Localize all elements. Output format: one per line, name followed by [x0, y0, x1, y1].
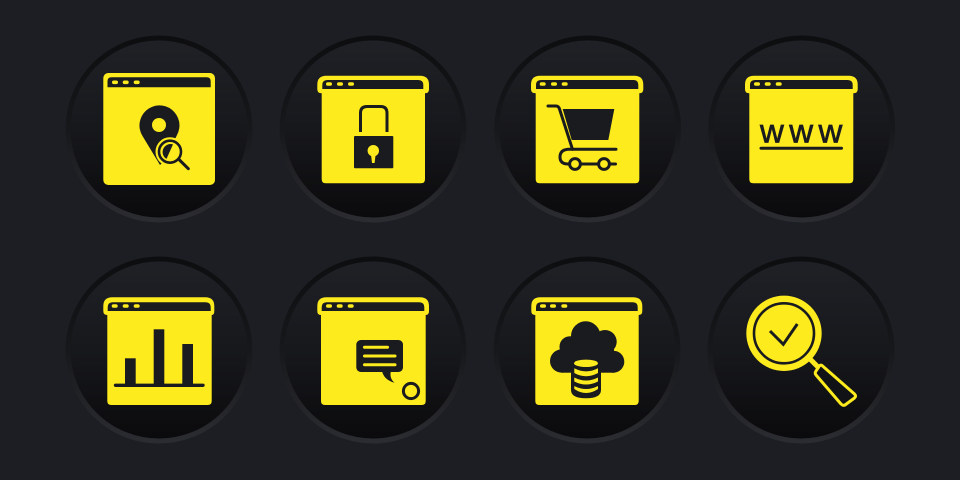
icon: browser window — [317, 297, 429, 405]
panel: shopping cart — [497, 38, 679, 220]
icon: check mark — [770, 324, 797, 344]
icon: browser window — [531, 76, 643, 183]
icon: cart — [548, 106, 616, 169]
icon: small ring — [403, 383, 419, 399]
icon: browser window — [745, 76, 858, 183]
panel: chat — [282, 259, 464, 441]
icon: browser window — [103, 73, 215, 185]
icon: map pin with magnifier — [139, 105, 188, 169]
icon: magnifying glass — [746, 296, 856, 405]
icon: padlock — [354, 106, 393, 168]
panel: cloud database — [496, 259, 678, 441]
icon: browser window — [103, 297, 214, 405]
icon: speech bubble — [356, 340, 403, 383]
panel: secure lock — [282, 38, 464, 220]
panel: bar chart — [68, 259, 250, 441]
underline — [761, 147, 842, 150]
icon: cloud — [550, 321, 624, 373]
icon: browser window — [531, 297, 642, 405]
text: www: www — [759, 113, 842, 150]
panel: magnifier check — [710, 259, 892, 441]
panel: location search — [68, 38, 250, 220]
bar chart — [116, 329, 203, 385]
icon: browser window — [317, 76, 429, 183]
icon: database — [571, 359, 601, 398]
panel: www — [711, 38, 893, 220]
